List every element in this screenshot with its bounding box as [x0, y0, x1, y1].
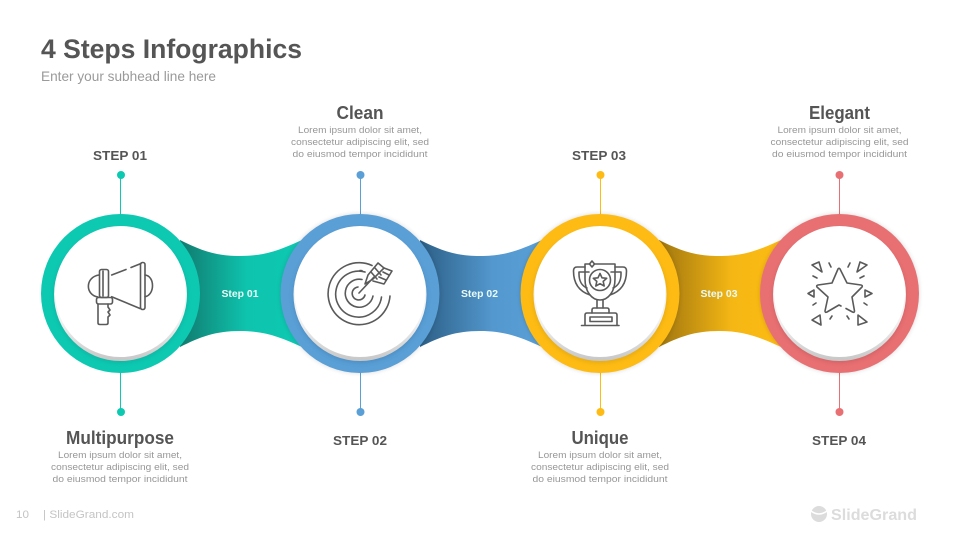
step 02 stem and dots	[356, 171, 364, 416]
connector: step 01	[180, 240, 302, 347]
text block: Unique: do eiusmod tempor incididunt	[532, 474, 668, 484]
text block: Unique: Lorem ipsum dolor sit amet,	[538, 450, 662, 460]
text block: Multipurpose: Lorem ipsum dolor sit amet,	[58, 450, 182, 460]
text block: Multipurpose: consectetur adipiscing elit, sed	[51, 462, 189, 472]
text block: Elegant	[770, 103, 908, 159]
icon: trophy	[574, 261, 626, 326]
text block: Unique: Unique	[572, 428, 628, 448]
connector: step 02: Step 02	[461, 289, 498, 300]
circle: step 03	[520, 214, 680, 374]
label: step 04: STEP 04	[812, 433, 867, 448]
connector: step 01: Step 01	[222, 289, 259, 300]
footer: page number: 10	[16, 509, 29, 521]
icon: megaphone	[88, 262, 152, 324]
title: 4 Steps Infographics	[41, 34, 302, 64]
label: step 02: STEP 02	[333, 433, 387, 448]
circle: step 04	[760, 214, 920, 374]
step 01 stem and dots	[117, 171, 125, 416]
connector: step 02	[420, 240, 542, 347]
text block: Elegant: consectetur adipiscing elit, sed	[770, 137, 908, 147]
text block: Clean: Lorem ipsum dolor sit amet,	[298, 125, 422, 135]
step 03 stem and dots	[596, 171, 604, 416]
logo: SlideGrand watermark: SlideGrand	[831, 507, 917, 524]
connector: step 03	[659, 240, 781, 347]
footer: site name: | SlideGrand.com	[43, 509, 134, 521]
text block: Clean: do eiusmod tempor incididunt	[292, 149, 428, 159]
text block: Clean: consectetur adipiscing elit, sed	[291, 137, 429, 147]
connector: step 03: Step 03	[700, 289, 738, 300]
text block: Unique	[531, 428, 669, 484]
text block: Elegant: Lorem ipsum dolor sit amet,	[778, 125, 902, 135]
text block: Multipurpose: do eiusmod tempor incididunt	[52, 474, 188, 484]
icon: target with arrow	[328, 263, 392, 325]
text block: Elegant: do eiusmod tempor incididunt	[772, 149, 908, 159]
subtitle: Enter your subhead line here	[41, 68, 216, 84]
label: step 03: STEP 03	[572, 148, 626, 163]
text block: Clean	[291, 103, 429, 159]
text block: Elegant: Elegant	[809, 103, 870, 123]
label: step 01: STEP 01	[93, 148, 147, 163]
text block: Multipurpose	[51, 428, 189, 484]
circle: step 02	[280, 214, 440, 374]
text block: Unique: consectetur adipiscing elit, sed	[531, 462, 669, 472]
text block: Multipurpose: Multipurpose	[66, 428, 174, 448]
text block: Clean: Clean	[336, 103, 384, 123]
icon: star with sparkles	[808, 262, 872, 325]
step 04 stem and dots	[836, 171, 844, 416]
circle: step 01	[41, 214, 200, 373]
